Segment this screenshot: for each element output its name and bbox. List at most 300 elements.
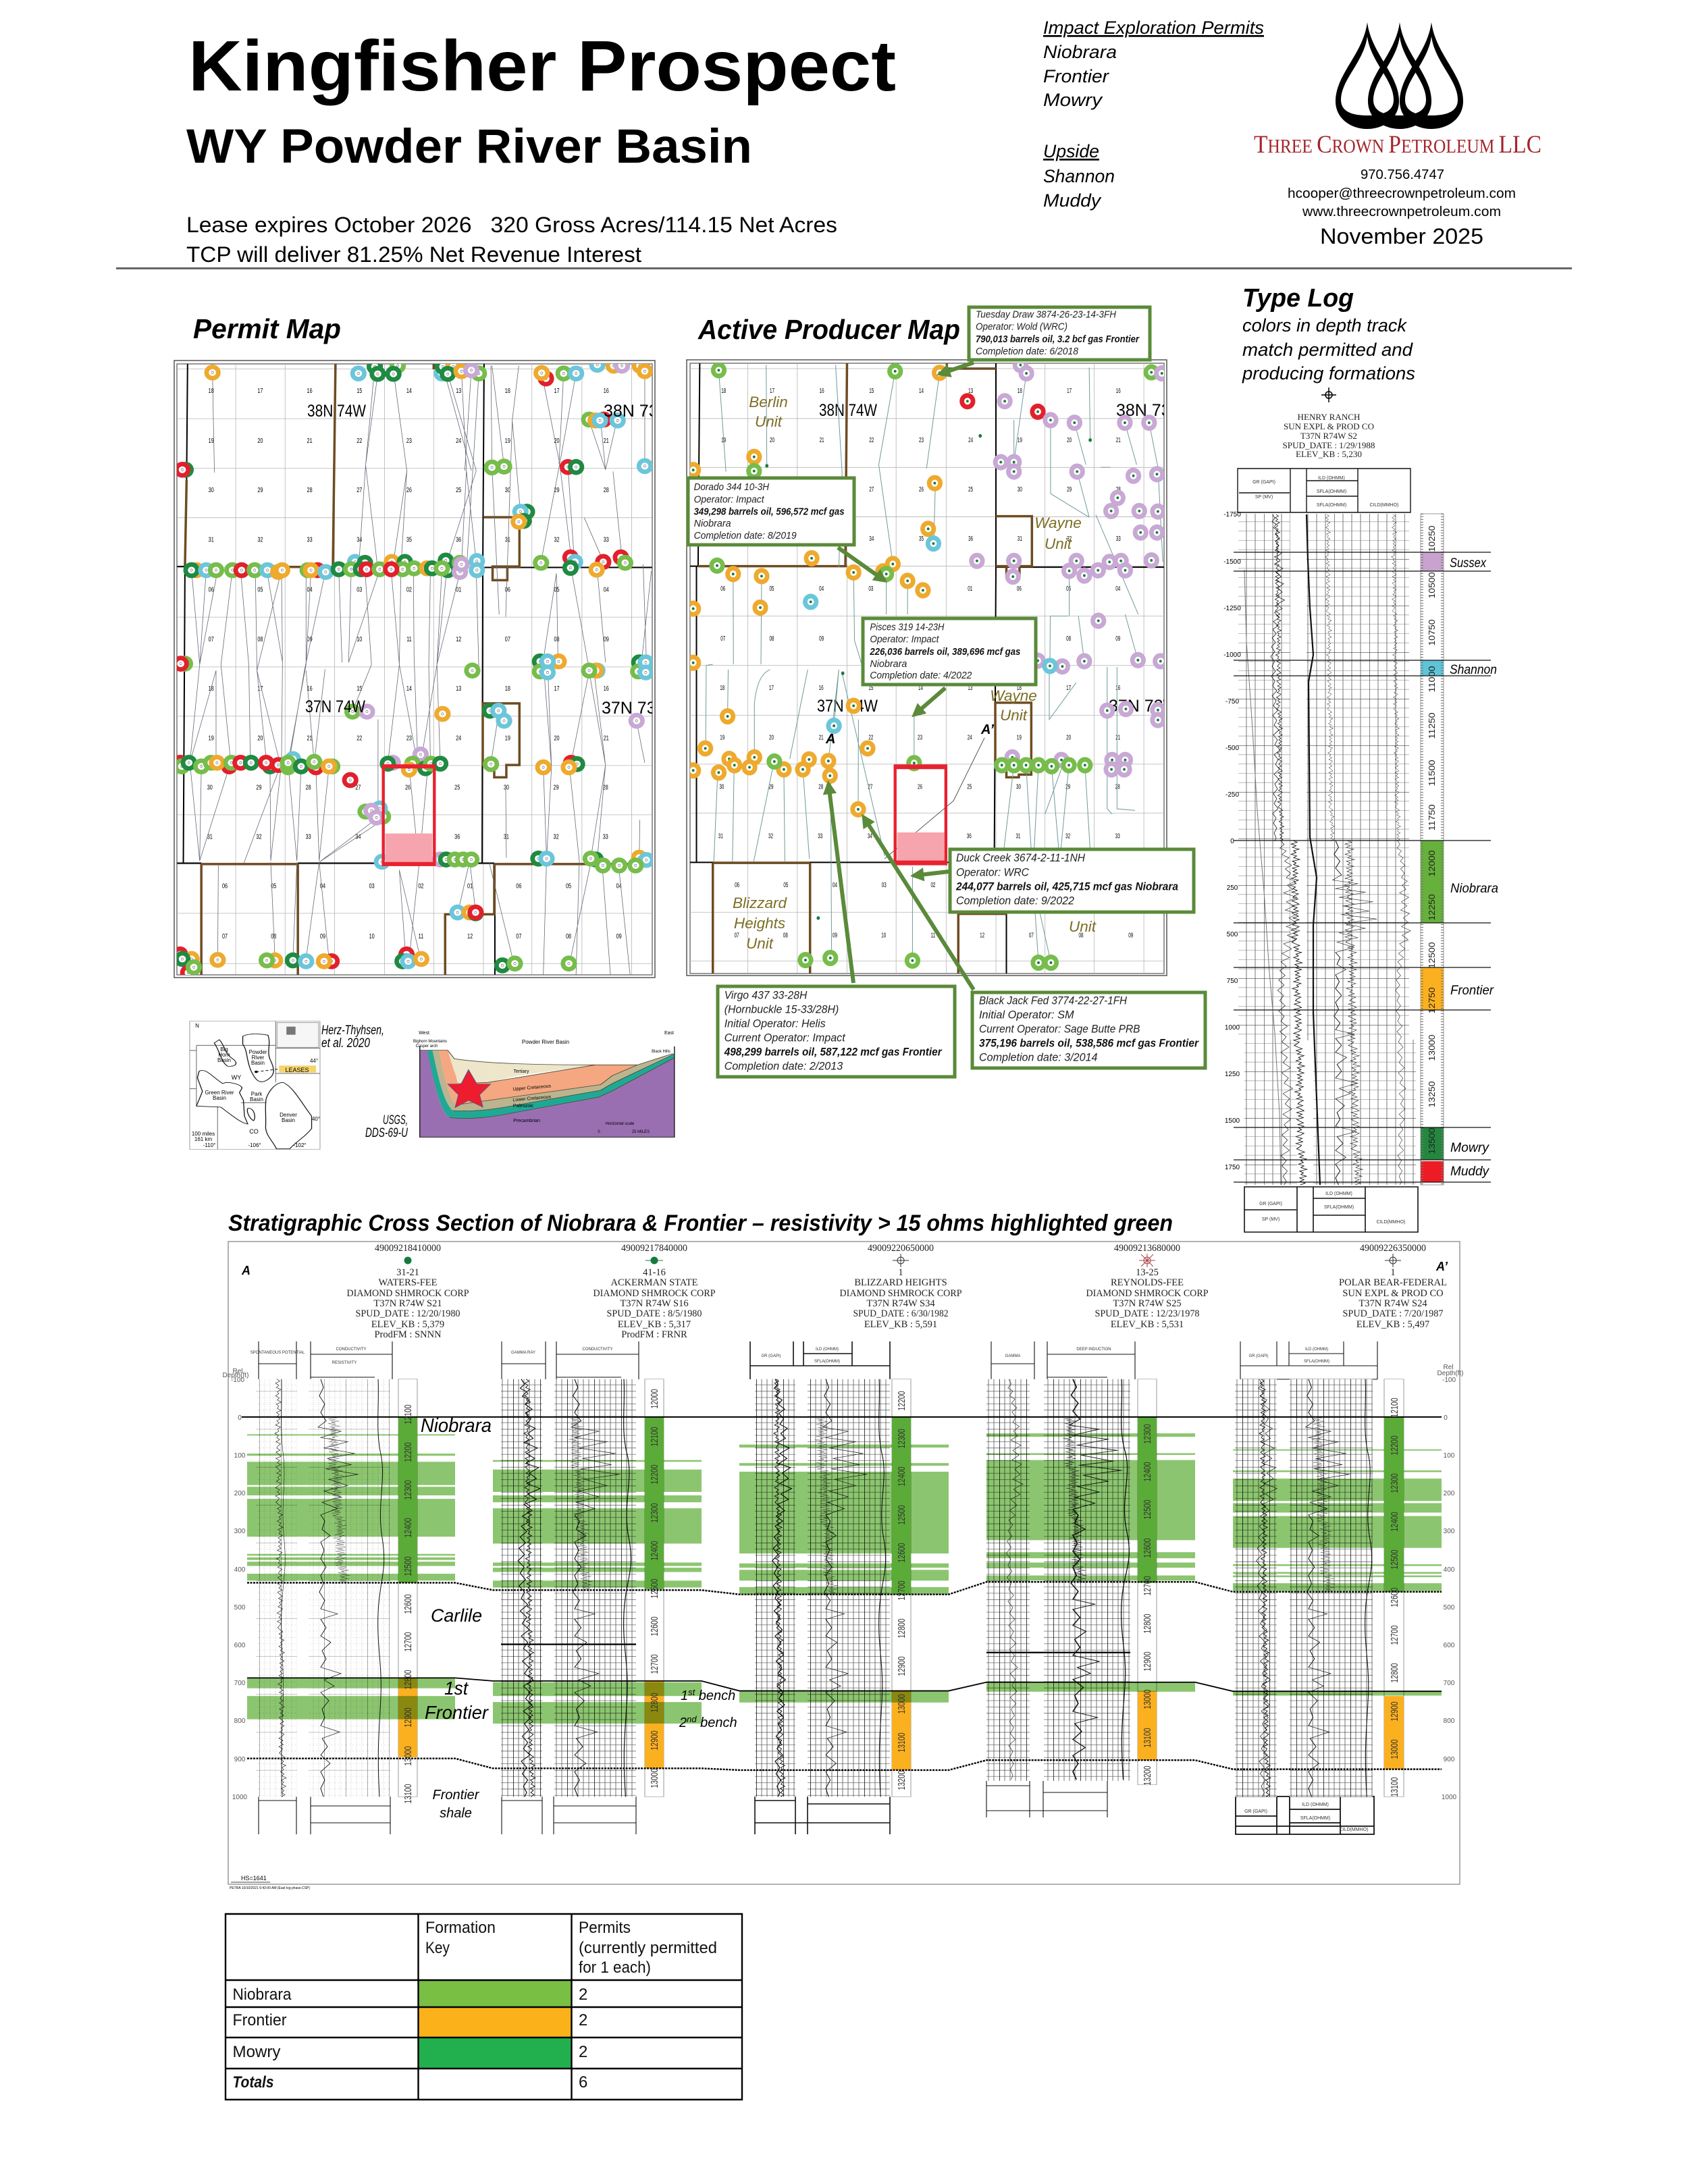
unit labels: Unit	[746, 935, 774, 952]
section numbers: 18	[1018, 386, 1022, 394]
citation: Herz-Thyhsen	[321, 1023, 384, 1050]
inset: basin cross section: West	[419, 1031, 429, 1036]
well header: Blizzard Heights: T37N R74W S34	[866, 1298, 935, 1309]
table: formation key and permits: (currently permitted	[579, 1939, 717, 1957]
log header captions: ILD (OHMM)	[1305, 1348, 1328, 1352]
depth labels well 1: 12700	[402, 1632, 414, 1651]
section numbers: 09	[819, 634, 824, 642]
relative depth scale left: 500	[234, 1604, 246, 1612]
section numbers: 15	[357, 685, 362, 692]
section numbers: 03	[369, 882, 375, 890]
depth labels well 4	[1142, 1424, 1153, 1785]
inset: location map: -102°	[293, 1142, 307, 1148]
callout: Duck Creek	[950, 849, 1194, 912]
well header: 41-16 Ackerman State	[593, 1243, 716, 1340]
log header captions: GR (GAPI)	[1244, 1809, 1267, 1814]
prospect lease rectangle	[895, 767, 946, 863]
callout: Dorado	[688, 478, 854, 545]
relative depth scale right: -100	[1442, 1377, 1456, 1384]
log header captions: CONDUCTIVITY	[582, 1348, 613, 1352]
callout: Dorado: Completion date: 8/2019	[694, 530, 797, 541]
section numbers: 06	[1017, 585, 1022, 593]
relative depth scale left: 600	[234, 1642, 246, 1649]
depth labels well 3: 12200	[896, 1391, 907, 1411]
section numbers: 20	[770, 435, 774, 444]
section numbers: 12	[456, 635, 461, 643]
section numbers: 09	[1128, 931, 1133, 939]
table: formation key and permits: 6	[579, 2073, 587, 2092]
relative depth scale right: 0	[1444, 1414, 1448, 1422]
depth labels well 2: 12000	[649, 1389, 660, 1408]
depth labels well 4: 12400	[1142, 1462, 1153, 1481]
title: Kingfisher Prospect	[188, 26, 896, 106]
section numbers: 26	[919, 485, 924, 493]
depth labels well 1: 12500	[402, 1557, 414, 1576]
inset: basin cross section	[413, 1031, 675, 1137]
citation: USGS: DDS-69-U	[365, 1126, 408, 1140]
unit labels: Heights	[734, 915, 785, 932]
section numbers: 30	[209, 486, 214, 494]
callout: Black Jack: Current Operator: Sage Butte PRB	[979, 1022, 1140, 1035]
section numbers: 15	[869, 386, 874, 394]
formation labels: 1st	[444, 1678, 469, 1699]
formation labels: Mowry	[1450, 1141, 1490, 1155]
section numbers: 15	[357, 387, 362, 395]
well header: 41-16 Ackerman State: ACKERMAN STATE	[611, 1277, 698, 1288]
township labels	[817, 401, 1187, 716]
type log description: producing formations	[1242, 363, 1415, 383]
callout: Virgo: Virgo 437 33-28H	[724, 989, 808, 1002]
depth track with formation colours: 11500	[1427, 760, 1437, 786]
depth ticks: 1250	[1225, 1071, 1240, 1078]
depth labels well 1: 12400	[402, 1518, 414, 1538]
depth labels well 2: 12400	[649, 1541, 660, 1561]
well header: 13-25 Reynolds-Fee	[1086, 1243, 1209, 1330]
inset: basin cross section: Horizontal scale	[606, 1122, 635, 1126]
section numbers: 30	[505, 486, 510, 494]
heading: Active Producer Map: Active Producer Map	[697, 314, 960, 345]
section numbers: 23	[406, 437, 412, 444]
section numbers: 18	[209, 387, 214, 395]
section numbers: 07	[720, 634, 726, 642]
log header captions: GR (GAPI)	[761, 1354, 781, 1358]
section numbers: 20	[554, 437, 560, 444]
table: formation key and permits: Totals	[232, 2073, 274, 2092]
section numbers: 31	[1018, 535, 1022, 543]
citation: Herz-Thyhsen: et al. 2020	[321, 1036, 370, 1050]
well header: Blizzard Heights: 1	[898, 1267, 903, 1278]
callout: Virgo	[718, 986, 955, 1077]
depth track with formation colours: 10750	[1427, 620, 1437, 645]
section numbers: 06	[505, 585, 510, 593]
prospect lease rectangle	[384, 766, 434, 864]
section numbers: 19	[1017, 733, 1022, 741]
section numbers: 12	[968, 634, 972, 642]
section numbers: 21	[820, 435, 824, 444]
section numbers: 20	[769, 733, 774, 741]
section numbers: 10	[868, 634, 874, 642]
depth ticks: 750	[1227, 978, 1238, 985]
section numbers: 33	[1115, 832, 1120, 840]
formation labels: 2	[679, 1715, 687, 1730]
inset: location map: Green River	[205, 1090, 234, 1096]
section numbers: 24	[968, 733, 972, 741]
relative depth scale left: 1000	[232, 1794, 248, 1801]
section numbers: 30	[1016, 782, 1021, 791]
section numbers: 31	[504, 832, 509, 841]
citation: USGS: USGS,	[383, 1113, 408, 1127]
section numbers: 18	[720, 684, 725, 692]
contact block: November 2025	[1320, 224, 1483, 248]
callout: Pisces: Completion date: 4/2022	[870, 670, 972, 681]
depth ticks: 0	[1230, 838, 1234, 845]
well header: 13-25 Reynolds-Fee: 13-25	[1136, 1267, 1159, 1278]
relative depth scale left: 900	[234, 1756, 246, 1763]
depth track with formation colours: 12750	[1427, 987, 1437, 1014]
relative depth scale right: 200	[1444, 1490, 1455, 1497]
formation labels: Frontier	[425, 1702, 490, 1723]
log header captions: GAMMA RAY	[511, 1351, 535, 1355]
depth ticks: -500	[1225, 745, 1239, 752]
depth labels well 3: 12400	[896, 1466, 907, 1487]
section numbers: 24	[968, 435, 973, 444]
callout: Black Jack: 375,196 barrels oil, 538,586 mcf gas Frontier	[979, 1036, 1199, 1049]
section numbers: 05	[554, 585, 560, 593]
section numbers: 02	[406, 585, 412, 593]
heading: Type Log: Type Log	[1242, 284, 1354, 313]
section numbers: 07	[222, 932, 228, 940]
log curves	[275, 1379, 286, 1796]
depth labels well 5: 12100	[1389, 1397, 1400, 1418]
unit labels: Unit	[1069, 918, 1097, 935]
well header: Polar Bear-Federal: ELEV_KB : 5,497	[1356, 1319, 1429, 1330]
depth labels well 2: 12500	[649, 1578, 660, 1599]
citation: Herz-Thyhsen: Herz-Thyhsen,	[321, 1023, 384, 1038]
depth ticks: 1750	[1225, 1164, 1240, 1171]
section numbers: 14	[918, 684, 923, 692]
section numbers: 32	[256, 832, 262, 841]
section numbers: 29	[769, 782, 774, 791]
section numbers: 18	[1017, 684, 1022, 692]
depth labels well 4: 12800	[1142, 1614, 1153, 1634]
relative depth scale right: 300	[1444, 1528, 1455, 1535]
section numbers: 14	[919, 386, 924, 394]
contact block: 970.756.4747	[1361, 167, 1444, 182]
section numbers: 22	[357, 437, 362, 444]
inset: basin cross section: 25 MILES	[632, 1130, 650, 1134]
section numbers: 27	[868, 782, 873, 791]
well header: 31-21 Waters-Fee: 31-21	[396, 1267, 419, 1278]
well header: Polar Bear-Federal: SPUD_DATE : 7/20/1987	[1342, 1308, 1444, 1319]
table: formation key and permits: Frontier	[232, 2011, 287, 2029]
section numbers: 36	[454, 832, 460, 841]
callout: Black Jack	[972, 992, 1205, 1068]
section numbers: 10	[369, 932, 375, 940]
relative depth scale right	[1438, 1364, 1463, 1801]
formation labels: Muddy	[1450, 1165, 1489, 1179]
well header: Blizzard Heights: 49009220650000	[868, 1243, 934, 1254]
well header: 31-21 Waters-Fee: T37N R74W S21	[373, 1298, 442, 1309]
callout: Tuesday Draw: Operator: Wold (WRC)	[976, 321, 1067, 332]
depth labels well 3: 13000	[896, 1695, 907, 1713]
depth ticks: -1750	[1223, 511, 1241, 518]
section numbers: 05	[257, 585, 263, 593]
callout: Duck Creek: Completion date: 9/2022	[956, 895, 1075, 907]
inset: location map: -110°	[203, 1142, 215, 1148]
software footer note: PETRA 10/10/2021 6:43:00 AM (East log phase.CSP)	[230, 1886, 310, 1890]
well header: 41-16 Ackerman State: SPUD_DATE : 8/5/1980	[606, 1308, 702, 1319]
permit list: Frontier	[1043, 66, 1109, 86]
section numbers: 14	[406, 685, 412, 692]
section numbers: 21	[1115, 733, 1121, 741]
formation labels	[1450, 556, 1498, 1179]
heading: Permit Map: Permit Map	[193, 313, 341, 344]
section numbers: 16	[820, 386, 824, 394]
permit list: Impact Exploration Permits	[1043, 18, 1264, 38]
callout: Duck Creek: Operator: WRC	[956, 866, 1030, 879]
unit labels: Wayne	[990, 687, 1037, 704]
callout: Dorado: 349,298 barrels oil, 596,572 mcf gas	[694, 506, 845, 517]
callout: Virgo: Current Operator: Impact	[724, 1032, 846, 1044]
formation labels: Frontier	[433, 1788, 480, 1803]
log header box: SP (MV)	[1255, 495, 1273, 500]
section numbers: 33	[820, 535, 824, 543]
section numbers: 19	[1018, 435, 1022, 444]
wells	[685, 357, 1169, 971]
well header: 31-21 Waters-Fee: WATERS-FEE	[378, 1277, 438, 1288]
relative depth scale right: 500	[1444, 1604, 1455, 1612]
callout: Virgo: Completion date: 2/2013	[724, 1060, 843, 1073]
depth labels well 5: 13100	[1389, 1777, 1400, 1797]
inset: location map: 161 km	[194, 1136, 212, 1142]
log footer box: SFLA(OHMM)	[1324, 1205, 1354, 1210]
section numbers: 34	[869, 535, 874, 543]
section numbers: 18	[721, 386, 726, 394]
well header: Blizzard Heights	[840, 1243, 961, 1330]
relative depth scale left: 700	[234, 1680, 246, 1687]
company name: THREE CROWN PETROLEUM LLC	[1254, 131, 1541, 159]
township labels	[305, 402, 675, 718]
relative depth scale left: 400	[234, 1566, 246, 1574]
inset: location map: Denver	[280, 1112, 297, 1118]
section numbers: 08	[769, 634, 774, 642]
relative depth scale right: 900	[1444, 1756, 1455, 1763]
well header: 13-25 Reynolds-Fee: DIAMOND SHMROCK CORP	[1086, 1288, 1209, 1299]
inset: location map: 44°	[310, 1058, 318, 1064]
permit list: Muddy	[1043, 190, 1102, 211]
section numbers: 13	[456, 387, 461, 395]
section numbers: 01	[456, 585, 461, 593]
depth labels well 3: 12500	[896, 1506, 907, 1524]
depth labels well 1: 12600	[402, 1595, 414, 1614]
depth ticks: 1000	[1225, 1024, 1240, 1032]
section numbers: 17	[257, 387, 263, 395]
section numbers: 29	[554, 783, 559, 791]
section endpoints A and A'	[241, 1260, 1448, 1277]
well header: 13-25 Reynolds-Fee: REYNOLDS-FEE	[1111, 1277, 1184, 1288]
section numbers: 08	[271, 932, 276, 940]
section numbers: 04	[604, 585, 609, 593]
depth labels well 5: 12600	[1389, 1588, 1400, 1607]
section numbers: 08	[783, 931, 788, 939]
section numbers: 23	[919, 435, 924, 444]
inset: basin cross section: Tertiary	[514, 1069, 529, 1074]
section numbers: 08	[566, 932, 571, 940]
depth track with formation colours	[1421, 514, 1444, 1185]
resistivity highlight bands	[247, 1433, 1442, 1724]
section numbers: 27	[869, 485, 874, 493]
contact block: www.threecrownpetroleum.com	[1302, 205, 1501, 219]
section numbers: 11	[918, 634, 923, 642]
depth track with formation colours: 11250	[1427, 713, 1437, 739]
log header captions: SFLA(OHMM)	[814, 1360, 840, 1364]
section numbers: 19	[505, 734, 510, 742]
icon: red star	[448, 1069, 491, 1108]
formation tops	[1234, 552, 1491, 1182]
well header: Polar Bear-Federal	[1339, 1243, 1447, 1330]
inset: location map: Powder	[248, 1049, 267, 1055]
depth ticks: -250	[1225, 791, 1239, 799]
well header: 31-21 Waters-Fee: ELEV_KB : 5,379	[371, 1319, 444, 1330]
log header captions: GR (GAPI)	[1248, 1354, 1269, 1358]
log header box: CILD(MMHO)	[1370, 503, 1398, 508]
permit list: Shannon	[1043, 166, 1115, 186]
section numbers: 36	[456, 535, 461, 543]
depth ticks: -750	[1225, 698, 1239, 705]
section numbers: 29	[257, 486, 263, 494]
log header captions: RESISTIVITY	[332, 1361, 357, 1365]
unit labels	[733, 394, 1097, 952]
relative depth scale left: 100	[234, 1452, 246, 1460]
panel: stratigraphic cross section	[223, 1242, 1463, 1884]
well laterals	[190, 366, 652, 974]
well header: 13-25 Reynolds-Fee: T37N R74W S25	[1113, 1298, 1182, 1309]
well header: 41-16 Ackerman State: T37N R74W S16	[620, 1298, 689, 1309]
section numbers: 31	[1016, 832, 1021, 840]
relative depth scale left: 300	[234, 1528, 246, 1535]
inset: basin cross section: Precambrian	[513, 1119, 540, 1123]
section numbers: 16	[604, 685, 609, 692]
relative depth scale right: 400	[1444, 1566, 1455, 1574]
inset: location map: River	[252, 1055, 265, 1061]
log footer box: GR (GAPI)	[1259, 1202, 1282, 1206]
depth labels well 1: 12100	[402, 1404, 414, 1424]
section numbers: 07	[1017, 634, 1022, 642]
lease terms: TCP will deliver 81.25% Net Revenue Interest	[186, 242, 641, 267]
depth track with formation colours: 13000	[1427, 1034, 1437, 1061]
relative depth scale left: 200	[234, 1490, 246, 1497]
relative depth scale right: Rel	[1443, 1364, 1454, 1371]
section numbers: 31	[718, 832, 723, 840]
callout: Dorado: Operator: Impact	[694, 494, 764, 505]
section numbers: 02	[418, 882, 424, 890]
section numbers: 05	[1066, 585, 1071, 593]
section numbers: 11	[419, 932, 423, 940]
section numbers: 21	[307, 734, 313, 742]
citation: USGS	[365, 1113, 408, 1140]
section numbers: 19	[505, 437, 510, 444]
inset: basin cross section: Bighorn Mountains	[413, 1040, 447, 1044]
section numbers: 28	[603, 783, 608, 791]
depth labels well 1: 12300	[402, 1480, 414, 1500]
well laterals	[706, 365, 1163, 963]
log header box: SFLA(OHMM)	[1317, 489, 1346, 494]
relative depth scale right: Depth(ft)	[1438, 1370, 1463, 1377]
inset: basin cross section: Black Hills	[652, 1050, 670, 1054]
inset: basin cross section: Lower Cretaceous	[512, 1095, 552, 1102]
relative depth scale left: Rel	[232, 1368, 243, 1375]
section numbers: 36	[968, 535, 973, 543]
well header: Blizzard Heights: SPUD_DATE : 6/30/1982	[853, 1308, 948, 1319]
table: formation key and permits: Formation	[425, 1919, 496, 1937]
well header: 31-21 Waters-Fee	[347, 1243, 469, 1340]
table: formation key and permits: Niobrara	[232, 1986, 292, 2004]
section numbers: 05	[566, 882, 571, 890]
depth track with formation colours: 13500	[1427, 1127, 1437, 1154]
section numbers: 20	[257, 437, 263, 444]
section numbers: 22	[868, 733, 874, 741]
depth labels well 2: 12600	[649, 1616, 660, 1636]
inset: location map: Basin	[282, 1117, 295, 1123]
section numbers: 28	[306, 783, 311, 791]
depth ticks: -1000	[1223, 651, 1241, 659]
well header: 41-16 Ackerman State: ELEV_KB : 5,317	[618, 1319, 691, 1330]
depth labels well 5: 12200	[1389, 1435, 1400, 1456]
section numbers: 16	[604, 387, 609, 395]
section numbers: 33	[306, 832, 311, 841]
section numbers: 16	[1115, 684, 1121, 692]
section numbers: 19	[721, 435, 726, 444]
formation labels: nd	[687, 1714, 697, 1724]
section numbers: 29	[554, 486, 560, 494]
type log description: colors in depth track	[1242, 315, 1407, 336]
depth labels well 5	[1389, 1397, 1400, 1797]
table: formation key and permits: for 1 each)	[579, 1959, 651, 1977]
section numbers: 19	[209, 437, 214, 444]
log header box: SFLA(OHMM)	[1317, 503, 1346, 508]
callout: Virgo: Initial Operator: Helis	[724, 1017, 826, 1030]
section numbers: 27	[357, 486, 362, 494]
section numbers: 28	[1116, 485, 1121, 493]
section numbers: 03	[357, 585, 362, 593]
section numbers: 35	[919, 535, 924, 543]
section numbers: 27	[355, 783, 361, 791]
log header captions: ILD (OHMM)	[816, 1348, 839, 1352]
depth labels well 2: 12100	[649, 1427, 660, 1446]
depth track with formation colours: 10500	[1427, 572, 1437, 598]
section numbers: 35	[917, 832, 922, 840]
section numbers: 12	[980, 931, 984, 939]
table: formation key and permits: Mowry	[232, 2043, 281, 2061]
lease terms	[186, 213, 837, 267]
depth labels well 3: 12300	[896, 1429, 907, 1449]
callout: Tuesday Draw: 790,013 barrels oil, 3.2 bcf gas Frontier	[976, 334, 1140, 345]
depth ticks	[1223, 511, 1241, 1171]
well header: Polar Bear-Federal: 49009226350000	[1360, 1243, 1426, 1254]
inset: location map: Basin	[213, 1095, 226, 1101]
section numbers: 13	[968, 386, 973, 394]
well header: Polar Bear-Federal: POLAR BEAR-FEDERAL	[1339, 1277, 1447, 1288]
section numbers: 07	[209, 635, 214, 643]
log header captions: GAMMA	[1005, 1354, 1020, 1358]
callout: Duck Creek: Duck Creek 3674-2-11-1NH	[956, 851, 1086, 864]
section numbers: 30	[719, 782, 724, 791]
section numbers: 26	[918, 782, 922, 791]
section numbers: 04	[833, 880, 837, 888]
log header box: ILD (OHMM)	[1318, 476, 1345, 481]
type log well header: SPUD_DATE : 1/29/1988	[1283, 440, 1375, 450]
section numbers: 05	[769, 585, 774, 593]
